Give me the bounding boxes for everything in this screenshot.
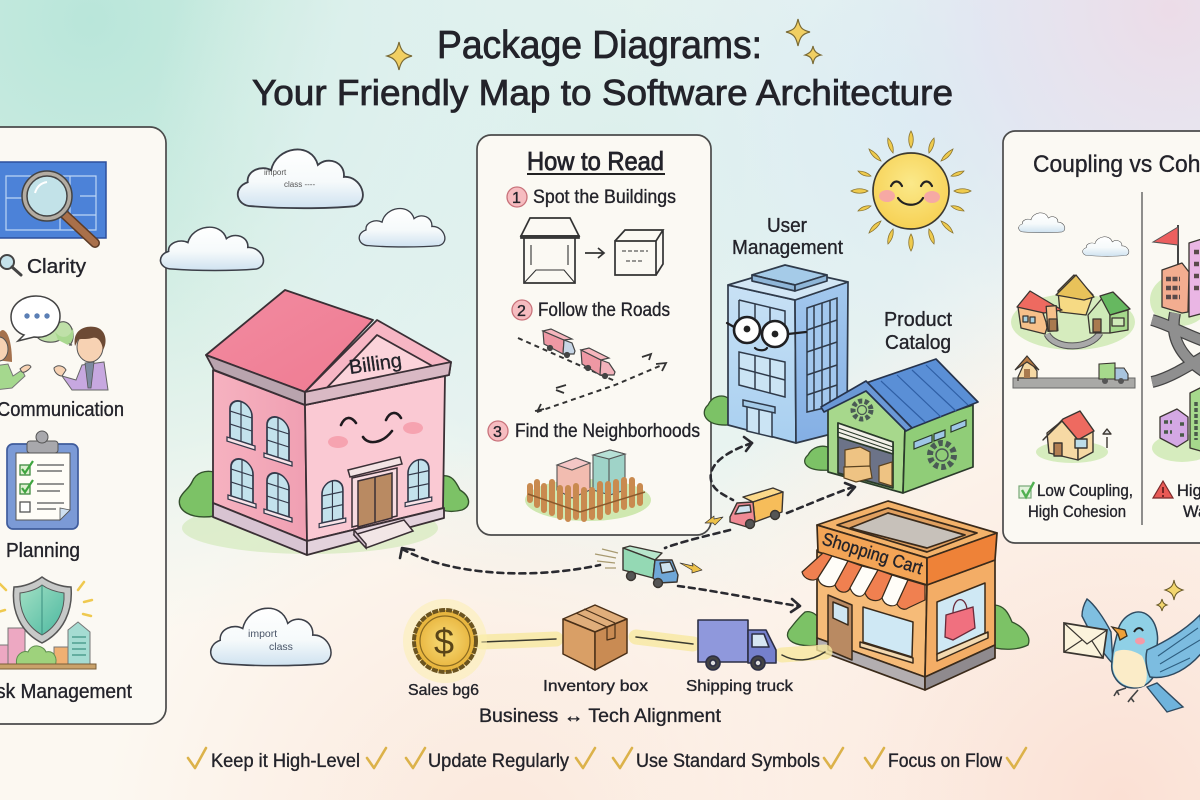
tips checklist [188,748,1026,772]
tower [728,265,848,443]
envelope [1064,623,1107,658]
building: Billing [179,290,469,555]
check marks [188,748,1026,768]
labels: Shipping truck [686,678,794,695]
icon: package to box [521,218,663,283]
labels [408,678,794,727]
label: low coupling [1019,482,1133,521]
icon: shipping truck [698,620,776,670]
icon: title sparkles [387,19,821,70]
awning [802,553,925,609]
step 3: 3 [493,424,502,441]
door and windows [828,583,988,663]
road with truck [1013,356,1135,388]
step 1: 1 [512,190,521,207]
building: Shopping Cart [787,501,1029,690]
icon: shopping bag [945,600,975,640]
single house [1036,411,1111,463]
cloud: import class bottom: class [269,641,293,653]
high coupling towers [1150,225,1200,462]
walls [817,550,995,690]
walls [828,386,973,493]
heading: How to Read [527,146,664,176]
step 2: 2 [517,303,526,320]
icon: sun [851,131,971,251]
labels: Inventory box [543,678,648,695]
low coupling village [1011,275,1135,350]
arrowheads [400,437,855,612]
label: Communication: Communication [0,399,124,421]
title [252,24,953,113]
cloud: import class bottom [211,608,331,666]
wing [1146,615,1200,677]
panel: benefits [0,127,166,724]
beak and face [1112,627,1127,640]
cloud: import class top [238,149,363,208]
step 3: Find the Neighborhoods [515,421,700,442]
cloud: import class top: import [264,168,287,177]
tail [1147,683,1183,712]
walls [213,370,445,555]
label: User Management: User [767,215,807,237]
icon: green truck [595,546,702,588]
icon: sales coin [403,599,487,683]
face [328,413,423,448]
gears [853,401,954,467]
far wing [1082,599,1113,664]
roof [821,359,978,431]
label: Product Catalog [884,309,952,354]
tip labels [211,751,1002,772]
icon: shield over city [0,577,96,669]
labels: Sales bg6 [408,682,479,699]
cloud: import class top: class ---- [284,180,315,189]
label: Planning: Planning [6,540,80,562]
building: User Management [704,265,848,443]
step 1: Spot the Buildings [533,187,676,208]
vents [914,420,966,449]
label: Product Catalog: Product [884,309,952,331]
icon: clipboard checklist [7,431,78,529]
panel: coupling vs cohesion [1003,131,1200,543]
label: Billing: Billing [348,350,403,379]
small clouds [1019,213,1129,256]
icon: roads and trucks [518,329,666,412]
face [727,317,806,350]
labels: Business ↔ Tech Alignment [479,706,722,727]
building: Product Catalog [805,359,978,493]
legs [1114,688,1138,702]
title: Your Friendly Map to Software Architecture [252,72,953,113]
cloud: left [160,227,263,270]
roof [817,501,997,585]
dashed connectors [402,443,853,606]
label: low coupling: High Cohesion [1028,503,1126,521]
door and steps [348,457,413,548]
icon: sales coin: $ [434,621,454,662]
sparkles [1157,580,1183,611]
icon: bluebird with envelope [1064,580,1200,712]
tip labels: Focus on Flow [888,751,1002,772]
label: Product Catalog: Catalog [885,332,951,354]
boxes [844,447,892,486]
tip labels: Keep it High-Level [211,751,360,772]
label: User Management: Management [732,237,843,259]
icon: inventory box [563,605,627,670]
windows [227,397,432,528]
icon: fenced neighborhood [525,450,651,521]
business alignment flow [403,599,825,727]
label: Clarity: Clarity [27,256,86,278]
step 2: Follow the Roads [538,300,670,321]
icon: yellow truck [705,488,783,528]
tip labels: Use Standard Symbols [636,751,820,772]
label: Clarity [0,255,86,278]
bushes [787,605,1029,649]
icon: blueprint with magnifier [0,162,106,243]
tip labels: Update Regularly [428,751,569,772]
label: User Management [732,215,843,259]
ground and bushes [179,471,469,554]
panel: how to read [477,135,711,535]
label: high coupling warning [1153,481,1200,521]
label: Shopping Cart: Shopping Cart [820,529,925,578]
icon: two people talking [0,296,108,390]
body [1112,612,1158,688]
glow links [482,637,825,660]
label: low coupling: Low Coupling, [1037,482,1133,500]
roof [206,290,451,405]
cloud: right [359,209,445,247]
title: Package Diagrams: [437,24,762,67]
windows [739,298,837,437]
cloud: import class bottom: import [248,628,277,640]
